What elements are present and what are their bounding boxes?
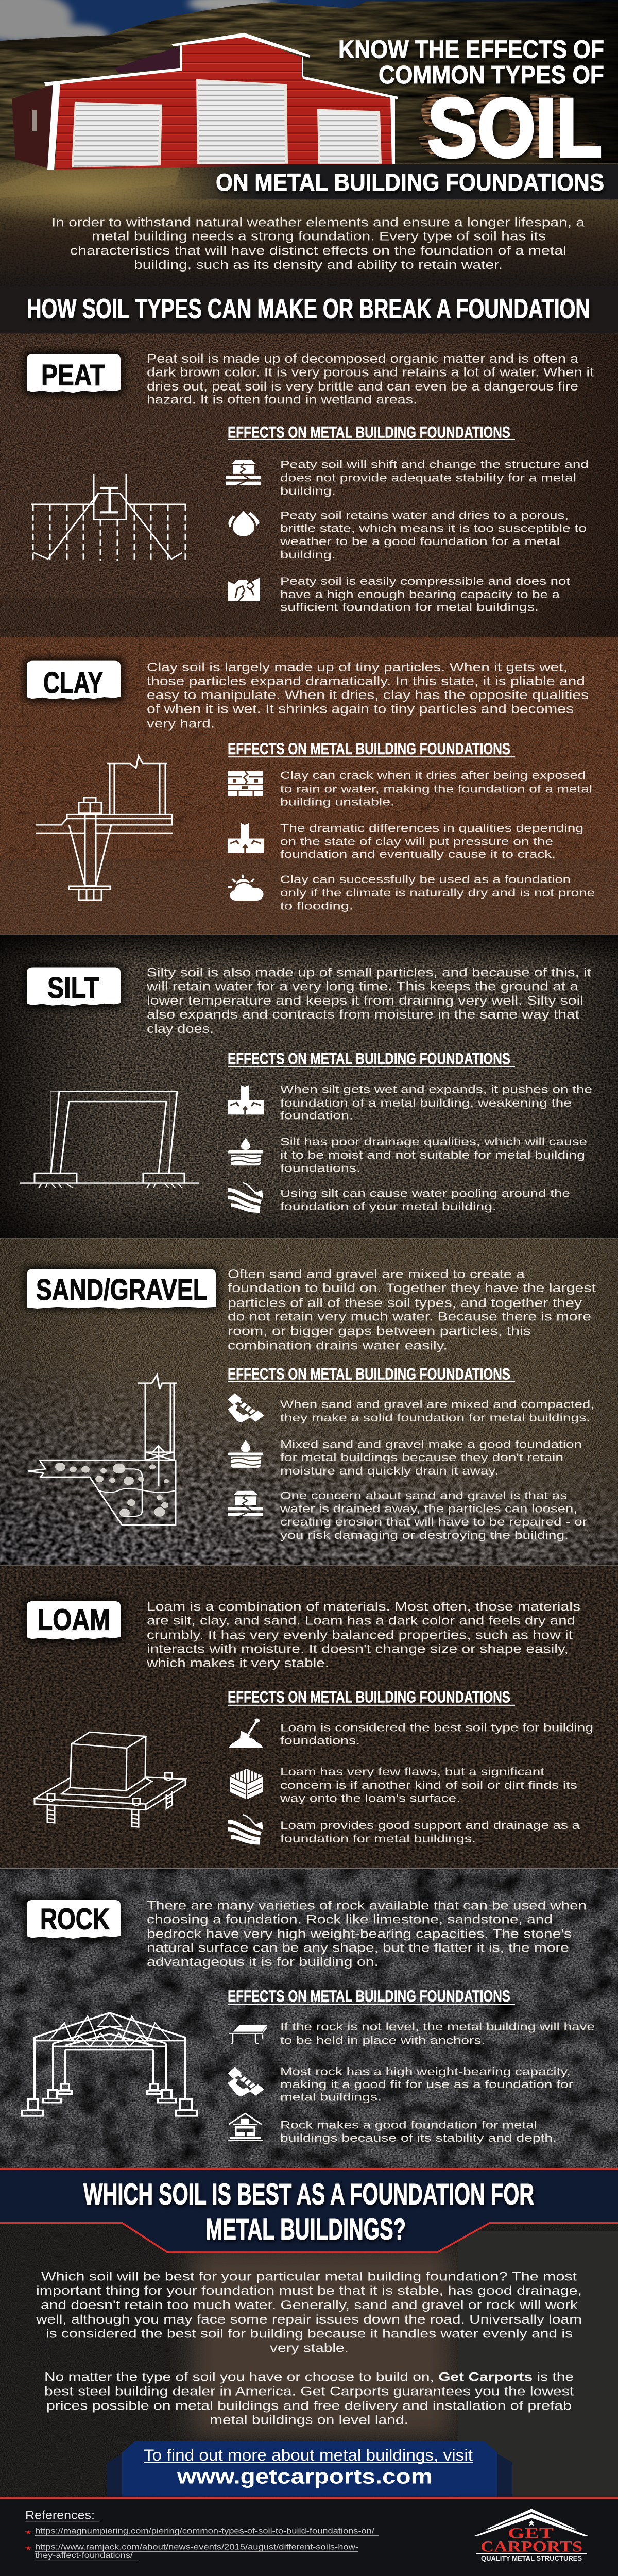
text: brittle state, which means it is too susceptible to <box>280 523 587 535</box>
mountains <box>0 1 618 168</box>
text <box>280 1490 587 1541</box>
text: to be held in place with anchors. <box>280 2035 485 2047</box>
icon: water flow <box>228 1183 263 1211</box>
effect: clay cracks <box>228 770 592 808</box>
icon: soil layers cube <box>230 1769 263 1800</box>
text: way onto the loam's surface. <box>280 1793 460 1805</box>
text <box>280 2021 595 2047</box>
loam description: which makes it very stable. <box>146 1656 329 1670</box>
text: building. <box>280 549 336 562</box>
sand and gravel description <box>228 1267 596 1352</box>
icon: water on soil <box>228 1138 263 1165</box>
label: rock: ROCK <box>40 1902 110 1936</box>
diagram: loam pier on plate <box>35 1732 185 1827</box>
text <box>280 2120 557 2144</box>
text: sufficient foundation for metal buildings. <box>280 602 539 614</box>
text: One concern about sand and gravel is that as <box>280 1490 567 1502</box>
text: weather to be a good foundation for a metal <box>280 536 560 548</box>
effect: erosion <box>228 1490 587 1541</box>
text: Clay can successfully be used as a foundation <box>280 874 571 886</box>
diagram: clay anchor bolt <box>36 756 173 900</box>
references: ★ <box>25 2545 31 2552</box>
effect: silt expands <box>228 1084 592 1122</box>
icon: house frame <box>228 2113 263 2141</box>
sand and gravel description: foundation to build on. Together they have the largest <box>228 1281 596 1295</box>
text: Loam is considered the best soil type for building <box>280 1722 593 1734</box>
references: References: <box>25 2509 95 2522</box>
text: to rain or water, making the foundation of a metal <box>280 784 592 795</box>
text: moisture and quickly drain it away. <box>280 1465 499 1477</box>
clay description: those particles expand dramatically. In this state, it is pliable and <box>147 674 585 688</box>
text: Most rock has a high weight-bearing capacity, <box>280 2066 571 2078</box>
text: When sand and gravel are mixed and compacted, <box>280 1399 594 1411</box>
peat description: hazard. It is often found in wetland areas. <box>147 393 417 406</box>
references: they-affect-foundations/ <box>35 2551 133 2560</box>
effect: peat compressible <box>228 575 570 614</box>
icon: water flow <box>228 1815 263 1843</box>
banner heading <box>83 2178 534 2246</box>
loam description: crumbly. It has very evenly balanced properties, such as how it <box>147 1628 573 1642</box>
diagram: gravel footing <box>28 1375 177 1525</box>
effect: clay pressure <box>228 822 583 860</box>
text: it to be moist and not suitable for metal building <box>280 1149 585 1162</box>
loam description: Loam is a combination of materials. Most often, those materials <box>147 1600 580 1614</box>
effect: silt pooling <box>228 1183 570 1213</box>
text: Silt has poor drainage qualities, which will cause <box>280 1136 587 1148</box>
text <box>280 2066 573 2104</box>
label: loam: LOAM <box>38 1603 110 1636</box>
intro text: In order to withstand natural weather elements and ensure a longer lifespan, a <box>52 215 585 229</box>
conclusion text: metal buildings on level land. <box>210 2413 408 2427</box>
barn <box>12 33 398 170</box>
text: water is drained away, the particles can loosen, <box>280 1503 577 1515</box>
conclusion text: well, although you may face some repair issues down the road. Universally loam <box>36 2312 582 2326</box>
silt description <box>146 965 592 1036</box>
text <box>280 1399 594 1424</box>
references <box>25 2509 379 2560</box>
text: Mixed sand and gravel make a good foundation <box>280 1439 582 1451</box>
text: Peaty soil is easily compressible and does not <box>280 575 570 587</box>
references: https://magnumpiering.com/piering/common-types-of-soil-to-build-foundations-on/ <box>35 2526 374 2535</box>
conclusion text: very stable. <box>270 2341 349 2355</box>
text: Using silt can cause water pooling around the <box>280 1188 570 1200</box>
label: loam <box>24 1598 124 1642</box>
label: rock <box>24 1896 124 1941</box>
conclusion text: Which soil will be best for your particular metal building foundation? The most <box>41 2269 577 2283</box>
effect: compacted <box>228 1393 594 1424</box>
label: clay <box>24 657 124 702</box>
clay description: very hard. <box>147 717 215 731</box>
hero photo: metal barn on soil mound <box>0 0 618 286</box>
icon: sun and cloud <box>228 875 264 901</box>
text: If the rock is not level, the metal building will have <box>280 2021 595 2033</box>
icon: water on soil <box>228 1440 263 1468</box>
icon: fist <box>228 2067 264 2096</box>
text: they make a solid foundation for metal buildings. <box>280 1412 590 1424</box>
silt description: clay does. <box>147 1022 214 1036</box>
text: The dramatic differences in qualities depending <box>280 822 583 835</box>
navy banner <box>0 2169 618 2252</box>
footer <box>0 2497 618 2576</box>
text: Peaty soil will shift and change the structure and <box>280 459 589 471</box>
sand and gravel description: combination drains water easily. <box>228 1338 448 1352</box>
text <box>280 874 595 912</box>
call to action: www.getcarports.com <box>177 2465 433 2488</box>
text <box>280 1136 587 1175</box>
intro text: metal building needs a strong foundation. Every type of soil has its <box>92 229 546 243</box>
label: sand/gravel: SAND/GRAVEL <box>36 1273 208 1306</box>
panel: which soil is best <box>0 2169 618 2498</box>
icon: shovel in mound <box>229 1718 263 1748</box>
logo: Get Carports <box>474 2509 589 2562</box>
title <box>216 35 604 196</box>
icon: compressed soil <box>228 577 260 601</box>
text: for metal buildings because they don't retain <box>280 1452 563 1464</box>
text <box>280 1722 593 1747</box>
text: foundation. <box>280 1110 353 1122</box>
loam description <box>146 1600 580 1670</box>
text <box>280 1820 580 1845</box>
text: foundation for metal buildings. <box>280 1833 476 1845</box>
icon: pressure on column <box>228 1085 264 1114</box>
effect: best soil <box>229 1718 593 1748</box>
peat description: dark brown color. It is very porous and retains a lot of water. When it <box>147 365 594 379</box>
effect: anchors <box>229 2021 595 2047</box>
references: https://www.ramjack.com/about/news-events/2015/august/different-soils-how- <box>35 2542 358 2551</box>
text: buildings because of its stability and depth. <box>280 2132 557 2144</box>
intro text: building, such as its density and ability to retain water. <box>134 258 503 272</box>
effect: clay dry climate <box>228 874 595 912</box>
logo: Get Carports: CARPORTS <box>480 2539 582 2555</box>
conclusion text <box>36 2269 582 2427</box>
intro text <box>52 215 585 272</box>
sand and gravel description: do not retain very much water. Because there is more <box>228 1310 591 1324</box>
text: you risk damaging or destroying the building. <box>280 1530 569 1541</box>
effect: peat shift <box>226 459 589 497</box>
conclusion text: No matter the type of soil you have or choose to build on, Get Carports is the <box>44 2369 574 2384</box>
text: to flooding. <box>280 901 353 912</box>
text <box>280 1188 570 1213</box>
text <box>280 1084 592 1122</box>
peat description: dries out, peat soil is very brittle and can even be a dangerous fire <box>147 380 578 394</box>
references: ★ <box>25 2529 31 2536</box>
icon: fist <box>228 1393 264 1422</box>
text: Rock makes a good foundation for metal <box>280 2120 537 2131</box>
icon: cracked house <box>226 460 261 485</box>
panel: loam <box>0 1566 618 1869</box>
icon: water drops <box>228 511 260 536</box>
effect: peat retains water <box>228 510 587 562</box>
clay description <box>147 660 589 731</box>
text <box>280 459 589 497</box>
text <box>280 1766 577 1805</box>
icon: anchored slab <box>229 2025 268 2044</box>
silt description: lower temperature and keeps it from draining very well. Silty soil <box>147 994 583 1008</box>
text <box>280 575 570 614</box>
panel: clay <box>0 637 618 935</box>
text: concern is if another kind of soil or dirt finds its <box>280 1780 577 1792</box>
label: clay: CLAY <box>43 666 103 699</box>
intro text: characteristics that will have distinct effects on the foundation of a metal <box>70 244 566 258</box>
panel: rock <box>0 1869 618 2169</box>
text: creating erosion that will have to be repaired - or <box>280 1516 587 1528</box>
clouds <box>0 0 276 47</box>
peat description <box>147 352 594 406</box>
clay description: Clay soil is largely made up of tiny particles. When it gets wet, <box>147 660 568 674</box>
peat description: Peat soil is made up of decomposed organic matter and is often a <box>147 352 578 366</box>
text: Clay can crack when it dries after being exposed <box>280 770 586 782</box>
text: Peaty soil retains water and dries to a porous, <box>280 510 569 522</box>
effect: drainage <box>228 1439 582 1477</box>
text: foundations. <box>280 1735 360 1747</box>
effect: drainage <box>228 1815 580 1845</box>
label: silt <box>24 964 124 1009</box>
text <box>280 510 587 562</box>
conclusion text: and doesn't retain too much water. Generally, sand and gravel or rock will work <box>41 2298 578 2312</box>
text: does not provide adequate stability for a metal <box>280 472 576 484</box>
text: foundations. <box>280 1163 360 1175</box>
text: metal buildings. <box>280 2092 382 2104</box>
effect: silt drainage <box>228 1136 587 1175</box>
text: have a high enough bearing capacity to be a <box>280 589 560 601</box>
silt description: also expands and contracts from moisture in the same way that <box>147 1008 580 1021</box>
gravel stones <box>55 1463 169 1517</box>
text: foundation of a metal building, weakening the <box>280 1097 572 1109</box>
rock description <box>147 1899 587 1969</box>
effect: weight <box>228 2066 573 2104</box>
label: peat <box>24 351 124 395</box>
panel: sand and gravel <box>0 1239 618 1566</box>
banner heading: METAL BUILDINGS? <box>205 2213 406 2246</box>
label: peat: PEAT <box>41 359 105 392</box>
clay description: of when it is wet. It shrinks again to tiny particles and becomes <box>147 702 574 716</box>
silt description: Silty soil is also made up of small particles, and because of this, it <box>147 965 592 979</box>
text: foundation of your metal building. <box>280 1201 496 1213</box>
text: only if the climate is naturally dry and is not prone <box>280 887 595 900</box>
text: on the state of clay will put pressure on the <box>280 836 553 848</box>
ground <box>0 163 618 286</box>
rock description: bedrock have very high weight-bearing capacities. The stone's <box>147 1927 572 1941</box>
effect: flaws <box>230 1766 577 1805</box>
text: building. <box>280 485 336 497</box>
text: foundation and eventually cause it to crack. <box>280 849 556 860</box>
sand and gravel description: Often sand and gravel are mixed to create a <box>228 1267 525 1281</box>
loam description: interacts with moisture. It doesn't change size or shape easily, <box>147 1642 569 1656</box>
text: building unstable. <box>280 796 394 808</box>
diagram: rock frames <box>22 2013 197 2116</box>
loam description: are silt, clay, and sand. Loam has a dark color and feels dry and <box>147 1614 575 1628</box>
text: Loam has very few flaws, but a significant <box>280 1766 544 1778</box>
logo: Get Carports: GET <box>508 2525 554 2542</box>
label: silt: SILT <box>47 971 99 1005</box>
section heading band <box>0 286 618 334</box>
call to action: To find out more about metal buildings, visit <box>144 2447 473 2464</box>
diagram: peat footing <box>31 474 186 561</box>
conclusion text: is considered the best soil for building because it handles water evenly and is <box>46 2326 573 2341</box>
panel: silt <box>0 935 618 1239</box>
conclusion text: best steel building dealer in America. Get Carports guarantees you the lowest <box>44 2384 574 2398</box>
diagram: silt frame <box>20 1091 199 1188</box>
conclusion text: prices possible on metal buildings and free delivery and installation of prefab <box>46 2398 572 2413</box>
rock description: natural surface can be any shape, but the flatter it is, the more <box>147 1941 569 1955</box>
dark band behind subtitle <box>174 164 618 199</box>
logo: Get Carports: QUALITY METAL STRUCTURES <box>481 2555 582 2562</box>
panel: peat <box>0 334 618 637</box>
label: sand/gravel <box>24 1266 219 1310</box>
effect: stability <box>228 2113 557 2144</box>
icon: cracked bricks <box>228 771 263 796</box>
rock description: choosing a foundation. Rock like limestone, sandstone, and <box>147 1912 553 1926</box>
conclusion text: important thing for your foundation must be that it is stable, has good drainage, <box>36 2283 582 2298</box>
background <box>0 2169 618 2498</box>
call to action <box>107 2441 512 2497</box>
clay description: easy to manipulate. When it dries, clay has the opposite qualities <box>147 688 589 702</box>
silt description: will retain water for a very long time. This keeps the ground at a <box>146 979 578 993</box>
sand and gravel description: room, or bigger gaps between particles, this <box>228 1324 531 1338</box>
rock description: There are many varieties of rock available that can be used when <box>147 1899 587 1912</box>
text <box>280 770 592 808</box>
text <box>280 1439 582 1477</box>
text: When silt gets wet and expands, it pushes on the <box>280 1084 592 1096</box>
text: Loam provides good support and drainage as a <box>280 1820 580 1832</box>
sand and gravel description: particles of all of these soil types, and together they <box>228 1296 582 1310</box>
icon: pressure on column <box>228 823 264 853</box>
rock description: advantageous it is for building on. <box>147 1955 379 1969</box>
text: making it a good fit for use as a foundation for <box>280 2079 573 2091</box>
text <box>280 822 583 860</box>
icon: cracked house <box>228 1491 263 1517</box>
